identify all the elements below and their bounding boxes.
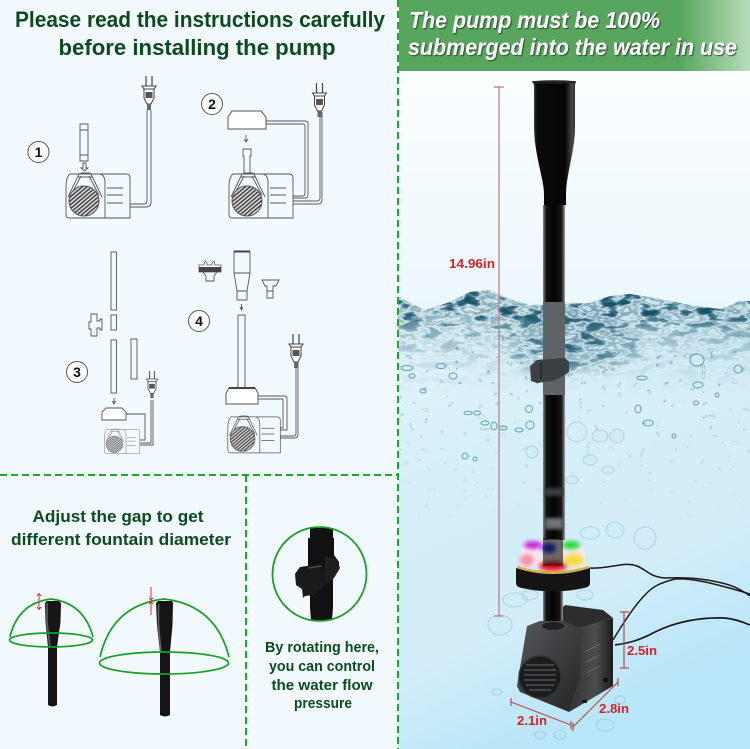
top face <box>563 605 613 628</box>
dashed dividers <box>0 0 398 749</box>
pump cables <box>590 564 750 645</box>
step 3 diagram <box>66 252 158 454</box>
panel: flow valve <box>265 527 379 712</box>
stem <box>243 149 251 173</box>
plug <box>312 83 326 117</box>
measurement: height line <box>494 87 504 616</box>
step number 4 <box>188 310 210 332</box>
pump <box>228 416 280 453</box>
cap nozzle <box>262 280 279 298</box>
led ring <box>516 538 590 592</box>
valve caption <box>265 640 379 712</box>
measurement label: 14.96in: 14.96in <box>449 257 495 271</box>
grille <box>519 656 561 698</box>
panel: adjust the gap <box>10 508 232 716</box>
front face <box>517 621 580 712</box>
water surface foam <box>398 290 750 386</box>
jet nozzle <box>532 80 576 205</box>
stem <box>543 591 563 629</box>
pump body <box>517 605 613 712</box>
spare pipe <box>131 339 137 379</box>
cables <box>266 121 308 198</box>
small fountain dome <box>10 594 93 706</box>
valve caption: you can control <box>269 659 375 675</box>
valve caption: the water flow <box>272 678 373 694</box>
down arrow <box>240 304 243 310</box>
step number 1 <box>28 142 49 162</box>
air background <box>399 71 750 311</box>
lid <box>226 388 258 404</box>
tube above water <box>543 205 565 305</box>
heading: read the instructions: Please read the instructions carefully <box>15 7 385 32</box>
step number 4: 4 <box>195 313 203 329</box>
tube submerged section <box>543 302 565 395</box>
valve caption: pressure <box>294 696 352 712</box>
step 4 diagram <box>188 252 303 453</box>
foggy highlights on tube <box>545 488 563 529</box>
heading: adjust the gap: Adjust the gap to get <box>32 508 204 526</box>
heading: read the instructions: before installing the pump <box>58 35 336 60</box>
header band: submerged warning <box>399 0 750 71</box>
heading: adjust the gap: different fountain diameter <box>11 531 232 549</box>
left background <box>0 0 398 749</box>
heading: read the instructions <box>15 7 385 60</box>
label 2.8in: 2.8in <box>599 701 629 716</box>
flower nozzle <box>199 261 221 281</box>
pump outline <box>229 173 293 218</box>
coupler pipe <box>80 124 88 161</box>
pump <box>105 429 140 454</box>
valve caption: By rotating here, <box>265 640 379 656</box>
dense bubble cluster <box>494 308 644 377</box>
pump outline <box>66 173 130 218</box>
stem collar <box>542 622 564 630</box>
panel: water scene <box>398 71 750 749</box>
hand-placed bubbles <box>401 354 742 740</box>
side face <box>569 618 613 712</box>
translucent dome <box>520 540 586 566</box>
step number 3: 3 <box>73 364 81 380</box>
led lid <box>228 111 266 129</box>
side ribs <box>586 644 600 673</box>
rising bubbles <box>398 322 750 510</box>
plug <box>289 334 303 368</box>
label 2.5in: 2.5in <box>627 643 657 658</box>
cables <box>126 400 153 445</box>
valve close-up <box>272 527 366 621</box>
step number 3 <box>66 362 88 382</box>
step 2 diagram <box>202 83 326 218</box>
plug <box>142 76 156 110</box>
feet <box>582 678 608 703</box>
power cord <box>130 110 151 207</box>
upper pipe <box>111 252 116 310</box>
down arrow <box>244 135 248 142</box>
heading: adjust the gap <box>11 508 232 549</box>
tube through ring <box>543 538 563 566</box>
down arrow <box>81 163 88 171</box>
down arrow <box>112 398 116 404</box>
tube lower section <box>543 395 565 545</box>
cables <box>258 396 287 430</box>
large fountain dome <box>100 587 229 716</box>
label 2.1in: 2.1in <box>517 713 547 728</box>
pipe <box>238 315 245 388</box>
step 1 diagram <box>28 76 156 218</box>
black disc base <box>516 568 590 592</box>
valve <box>89 314 102 336</box>
flow valve knob <box>530 358 569 383</box>
jet nozzle <box>234 252 250 300</box>
step number 1: 1 <box>35 144 43 160</box>
step number 2: 2 <box>208 96 216 112</box>
rainbow glow <box>520 541 584 571</box>
header band: submerged warning: The pump must be 100% <box>409 7 660 33</box>
plug <box>146 371 158 398</box>
coupler <box>111 315 116 330</box>
lid <box>102 408 126 420</box>
middle pipe <box>111 340 116 393</box>
water body <box>398 290 750 749</box>
measurement: pump dimensions <box>511 612 657 731</box>
